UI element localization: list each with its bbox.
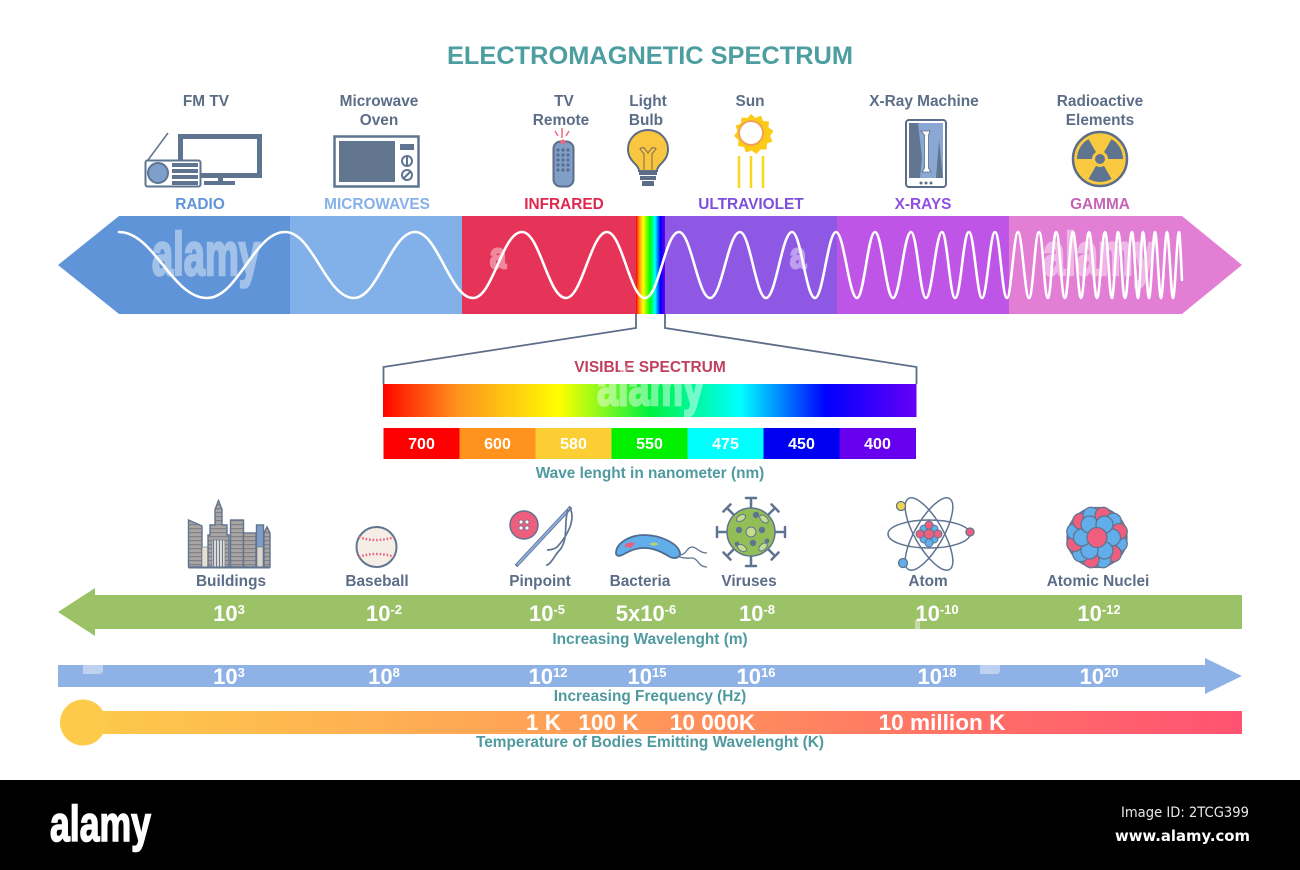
source labels row: Elements xyxy=(1066,112,1134,129)
watermarks on spectrum: alamy xyxy=(1043,221,1155,288)
wavelength scale boxes: 600 xyxy=(484,436,511,453)
object labels row: Atom xyxy=(908,573,948,590)
wavelength scale boxes: 450 xyxy=(788,436,815,453)
temperature values: 10 million K xyxy=(879,710,1006,735)
wavelength values: -5 xyxy=(553,602,565,617)
frequency values: 10 xyxy=(213,664,238,689)
frequency values: 20 xyxy=(1104,665,1118,680)
wavelength values xyxy=(213,601,1121,626)
source labels row: Remote xyxy=(533,112,590,129)
wavelength values: 3 xyxy=(238,602,245,617)
wavelength values: 10 xyxy=(739,601,763,626)
band labels row: X-RAYS xyxy=(895,196,951,213)
icon: virus xyxy=(717,498,785,566)
frequency values: 3 xyxy=(238,665,245,680)
watermark fragments on lower bars xyxy=(83,620,1000,674)
icon: radioactive symbol xyxy=(1073,132,1127,186)
frequency values: 10 xyxy=(918,664,942,689)
frequency values: 18 xyxy=(942,665,956,680)
temperature values xyxy=(526,710,1006,735)
object labels row: Buildings xyxy=(196,573,266,590)
source labels row: TV xyxy=(554,93,575,110)
icon: TV remote xyxy=(554,128,574,186)
wavelength values: 10 xyxy=(529,601,553,626)
object labels row xyxy=(196,573,1149,590)
wavelength values: 10 xyxy=(915,601,940,626)
source labels row: Light xyxy=(629,93,667,110)
icon: x-ray machine xyxy=(906,120,946,187)
source labels row: X-Ray Machine xyxy=(869,93,979,110)
frequency values: 15 xyxy=(652,665,666,680)
source labels row: Microwave xyxy=(340,93,419,110)
icon: baseball xyxy=(356,527,396,567)
temperature bar xyxy=(60,700,1242,746)
temperature values: 10 000K xyxy=(670,710,756,735)
frequency values: 10 xyxy=(529,664,553,689)
source labels row: Radioactive xyxy=(1057,93,1144,110)
object labels row: Bacteria xyxy=(610,573,671,590)
frequency values: 10 xyxy=(628,664,652,689)
watermarks on spectrum: alamy xyxy=(152,221,260,288)
footer image id: Image ID: 2TCG399 xyxy=(1121,805,1249,821)
source labels row xyxy=(183,93,1144,129)
icon: bacteria xyxy=(616,535,707,567)
wavelength values: 10 xyxy=(213,601,238,626)
watermarks on spectrum xyxy=(152,221,1155,288)
wavelength scale boxes xyxy=(384,428,916,459)
wave line xyxy=(119,232,1182,298)
icon: atom xyxy=(888,491,974,577)
caption: wavelength: Increasing Wavelenght (m) xyxy=(552,631,748,648)
icon: radio and TV xyxy=(146,133,260,186)
band labels row: MICROWAVES xyxy=(324,196,430,213)
icon: sun with rays xyxy=(734,114,774,188)
frequency values: 8 xyxy=(393,665,400,680)
wavelength scale boxes: 475 xyxy=(712,436,739,453)
temperature values: 100 K xyxy=(578,710,639,735)
icon: buildings xyxy=(188,500,270,568)
object labels row: Pinpoint xyxy=(509,573,571,590)
frequency values: 12 xyxy=(553,665,567,680)
source labels row: Oven xyxy=(360,112,398,129)
icon: atomic nucleus xyxy=(1065,505,1129,570)
watermarks on spectrum: a xyxy=(790,235,807,276)
wavelength values: -12 xyxy=(1102,602,1121,617)
band labels row xyxy=(175,196,1130,213)
source labels row: Bulb xyxy=(629,112,663,129)
wavelength scale boxes: 580 xyxy=(560,436,587,453)
wavelength scale boxes: 400 xyxy=(864,436,891,453)
wavelength values: 10 xyxy=(1077,601,1102,626)
band labels row: INFRARED xyxy=(524,196,604,213)
icon: button and needle xyxy=(510,507,572,566)
frequency values: 10 xyxy=(737,664,761,689)
footer band xyxy=(0,780,1300,870)
frequency arrow xyxy=(58,658,1242,694)
temperature values: 1 K xyxy=(526,710,562,735)
object labels row: Viruses xyxy=(721,573,777,590)
caption: frequency: Increasing Frequency (Hz) xyxy=(554,688,746,705)
frequency values: 16 xyxy=(761,665,775,680)
footer logo: alamy xyxy=(50,796,151,852)
object labels row: Baseball xyxy=(345,573,409,590)
footer url: www.alamy.com xyxy=(1115,827,1250,845)
title: ELECTROMAGNETIC SPECTRUM xyxy=(447,42,853,70)
wavelength values: 5x10 xyxy=(616,601,665,626)
wavelength scale boxes: 550 xyxy=(636,436,663,453)
band labels row: GAMMA xyxy=(1070,196,1130,213)
source labels row: FM TV xyxy=(183,93,230,110)
source labels row: Sun xyxy=(735,93,765,110)
icon: microwave oven xyxy=(334,136,418,186)
band labels row: ULTRAVIOLET xyxy=(698,196,804,213)
frequency values xyxy=(213,664,1118,689)
frequency values: 10 xyxy=(1080,664,1104,689)
frequency values: 10 xyxy=(368,664,393,689)
object labels row: Atomic Nuclei xyxy=(1047,573,1149,590)
watermarks on spectrum: a xyxy=(490,235,507,276)
wavelength arrow xyxy=(58,588,1242,636)
visible gradient bar xyxy=(383,384,916,417)
wavelength scale boxes: 700 xyxy=(408,436,435,453)
icon: light bulb xyxy=(628,130,668,186)
band labels row: RADIO xyxy=(175,196,225,213)
wavelength values: 10 xyxy=(366,601,390,626)
watermark on gradient bar: alamy xyxy=(597,359,704,417)
heading: visible spectrum: VISIBLE SPECTRUM xyxy=(574,359,726,376)
wavelength values: -10 xyxy=(940,602,959,617)
zoom bracket xyxy=(384,314,916,384)
wavelength values: -8 xyxy=(763,602,775,617)
caption: temperature: Temperature of Bodies Emitting Wavelenght (K) xyxy=(476,734,824,751)
spectrum arrow with bands xyxy=(58,216,1242,314)
wavelength values: -6 xyxy=(665,602,676,617)
wavelength values: -2 xyxy=(390,602,402,617)
caption: wave length: Wave lenght in nanometer (nm) xyxy=(536,465,764,482)
